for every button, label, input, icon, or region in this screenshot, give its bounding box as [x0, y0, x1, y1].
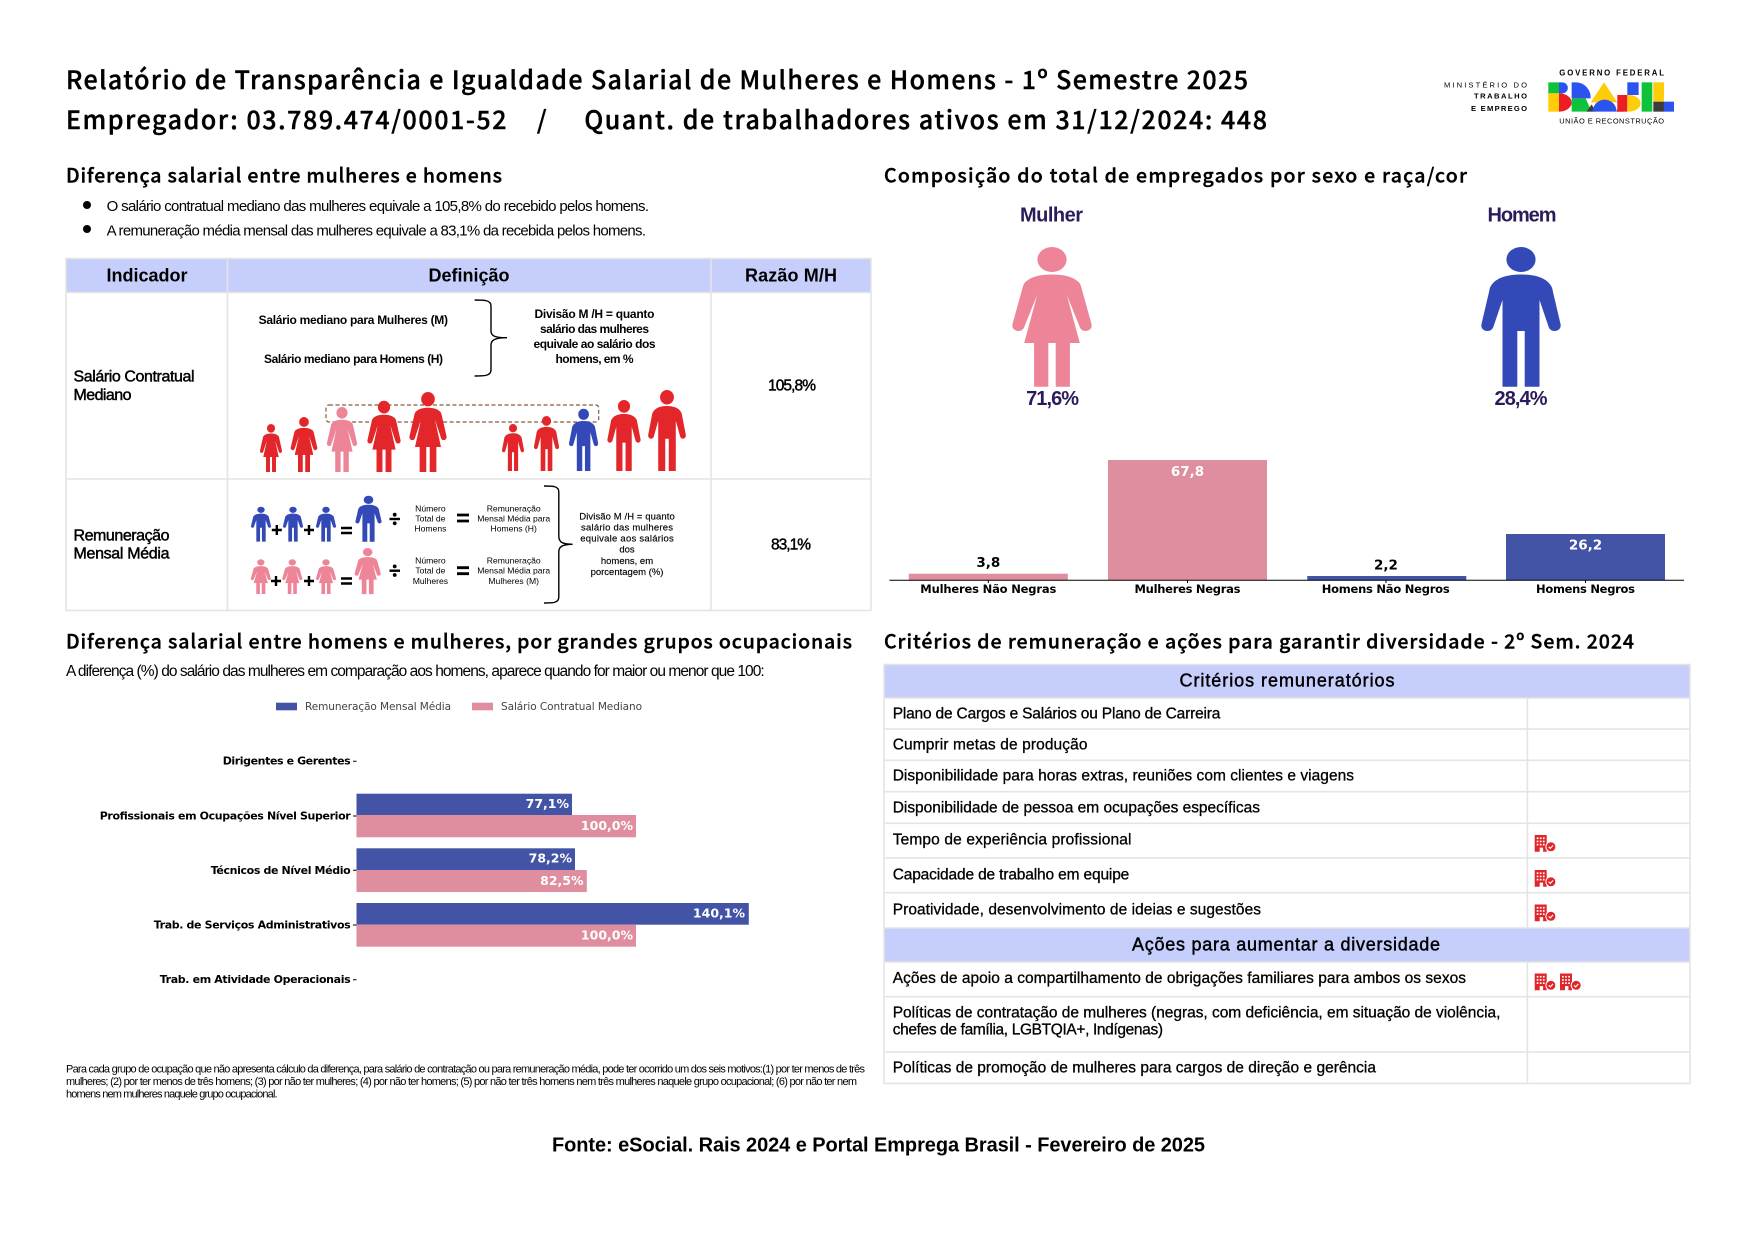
bullets: A remuneração média mensal das mulheres equivale a 83,1% da recebida pelos homens.	[107, 223, 646, 240]
footnote	[66, 1064, 866, 1100]
table: critérios e ações	[884, 664, 1690, 1084]
table: critérios e ações: Políticas de contratação de mulheres (negras, com deficiência, em situação de violência,	[893, 1005, 1500, 1022]
definition note: dos	[619, 545, 635, 556]
técnicos: 78,2%	[529, 851, 572, 866]
figure: homem: 28,4%	[1494, 388, 1548, 410]
formula labels: Homens (H)	[491, 524, 537, 534]
table: indicadores: Indicador	[106, 266, 188, 286]
definition note: Divisão M /H = quanto	[534, 307, 654, 321]
footnote: homens nem mulheres naquele grupo ocupacional.	[66, 1088, 278, 1100]
subtitle: A diferença (%) do salário das mulheres em comparação aos homens, aparece quando for maior ou menor que 100:	[66, 663, 765, 680]
source: Fonte: eSocial. Rais 2024 e Portal Emprega Brasil - Fevereiro de 2025	[552, 1135, 1205, 1157]
figure: mulher	[1012, 205, 1092, 410]
heading: composição: Composição do total de empregados por sexo e raça/cor	[884, 160, 1467, 189]
serviços administrativos	[356, 903, 749, 947]
category labels: Técnicos de Nível Médio	[211, 864, 351, 877]
table: critérios e ações: Disponibilidade para horas extras, reuniões com clientes e viagens	[893, 768, 1354, 785]
title	[66, 61, 1267, 137]
definition note	[579, 511, 675, 578]
people: men	[502, 390, 686, 471]
definition note: salário das mulheres	[540, 322, 649, 336]
table: critérios e ações: Disponibilidade de pessoa em ocupações específicas	[893, 799, 1260, 816]
definition note: porcentagem (%)	[591, 567, 663, 578]
logo: ministério e governo federal	[1444, 69, 1674, 125]
formula labels: Mulheres	[413, 576, 448, 586]
icon: empresa com selo, ações	[1535, 974, 1581, 990]
icon: empresa com selo, critérios	[1535, 835, 1556, 921]
row: salário contratual mediano	[74, 300, 816, 472]
category labels: Dirigentes e Gerentes	[223, 755, 351, 768]
formula labels: Remuneração	[487, 504, 541, 514]
logo: ministério e governo federal: TRABALHO	[1474, 92, 1527, 100]
category labels: Profissionais em Ocupações Nível Superior	[100, 810, 351, 822]
profissionais: 77,1%	[526, 796, 569, 811]
formula labels: Total de	[415, 565, 446, 575]
table: indicadores: Razão M/H	[745, 266, 837, 286]
legend	[276, 701, 642, 713]
formula labels	[413, 504, 550, 586]
bar chart: composição: 26,2	[1569, 538, 1602, 554]
category labels: Trab. de Serviços Administrativos	[154, 918, 351, 932]
formula labels: Total de	[415, 514, 446, 524]
definition note: homens, em	[601, 556, 653, 567]
footnote: mulheres; (2) por ter menos de três homens; (3) por não ter mulheres; (4) por não ter homens; (5) por não ter três homens nem três mulheres naquele grupo ocupacional; (6) por não ter nem	[66, 1076, 857, 1088]
category labels	[100, 755, 351, 986]
table: critérios e ações: Plano de Cargos e Salários ou Plano de Carreira	[893, 705, 1221, 722]
técnicos	[356, 848, 587, 892]
bar chart: composição: Homens Negros	[1536, 582, 1635, 596]
formula labels: Mensal Média para	[477, 514, 550, 524]
big brace	[544, 486, 573, 603]
table: indicadores: Definição	[428, 266, 510, 286]
table: critérios e ações: Ações para aumentar a diversidade	[1132, 934, 1440, 954]
heading: grupos ocupacionais: Diferença salarial entre homens e mulheres, por grandes grupos ocupacionais	[66, 625, 852, 654]
logo: ministério e governo federal: E EMPREGO	[1471, 104, 1527, 113]
median dashed box	[326, 405, 599, 422]
formula labels: Mulheres (M)	[488, 576, 539, 586]
bar chart: composição: Mulheres Não Negras	[920, 582, 1056, 596]
figure: homem: Homem	[1488, 205, 1556, 227]
definition note: equivale ao salário dos	[534, 337, 656, 351]
definition note: equivale aos salários	[580, 534, 674, 545]
profissionais: 100,0%	[581, 818, 633, 833]
value: 105,8%	[768, 378, 816, 394]
category labels: Trab. em Atividade Operacionais	[160, 973, 351, 986]
row: salário contratual mediano: Mediano	[74, 387, 132, 404]
definition note: salário das mulheres	[581, 523, 673, 534]
bullets	[83, 198, 649, 240]
heading: critérios: Critérios de remuneração e ações para garantir diversidade - 2º Sem. 2024	[884, 625, 1634, 654]
figure: mulher: 71,6%	[1026, 388, 1079, 410]
table: critérios e ações: Proatividade, desenvolvimento de ideias e sugestões	[893, 901, 1261, 918]
formula labels: Número	[415, 555, 446, 565]
bullets: O salário contratual mediano das mulheres equivale a 105,8% do recebido pelos homens.	[107, 198, 649, 215]
bar chart: composição: Homens Não Negros	[1322, 582, 1450, 596]
people: women	[260, 392, 447, 472]
logo: ministério e governo federal: MINISTÉRIO DO	[1444, 81, 1527, 90]
bar chart: composição: 3,8	[976, 555, 1000, 571]
bar chart: composição: Mulheres Negras	[1134, 582, 1241, 596]
formula labels: Número	[415, 504, 446, 514]
serviços administrativos: 100,0%	[581, 927, 633, 942]
row: remuneração mensal média: Remuneração	[74, 528, 170, 545]
table: critérios e ações: Políticas de promoção de mulheres para cargos de direção e gerência	[893, 1059, 1376, 1076]
table: critérios e ações: Capacidade de trabalho em equipe	[893, 866, 1129, 883]
formula labels: Mensal Média para	[477, 565, 550, 575]
definition note: Divisão M /H = quanto	[579, 511, 675, 522]
bar chart: composição: 67,8	[1171, 464, 1204, 480]
legend: Salário Contratual Mediano	[501, 701, 642, 713]
logo: ministério e governo federal: UNIÃO E RECONSTRUÇÃO	[1559, 116, 1664, 125]
técnicos: 82,5%	[540, 873, 584, 888]
definition note	[534, 307, 656, 366]
row: salário contratual mediano: Salário mediano para Mulheres (M)	[259, 313, 448, 327]
formula labels: Remuneração	[487, 555, 541, 565]
women formula	[251, 548, 469, 594]
table: critérios e ações: Critérios remuneratórios	[1180, 671, 1394, 691]
table: critérios e ações: Cumprir metas de produção	[893, 736, 1088, 753]
heading: diferença salarial: Diferença salarial entre mulheres e homens	[66, 160, 502, 189]
bar chart: composição	[889, 460, 1684, 596]
definition note: homens, em %	[556, 352, 634, 366]
logo: ministério e governo federal: GOVERNO FEDERAL	[1559, 69, 1664, 78]
row: remuneração mensal média	[74, 486, 811, 603]
row: salário contratual mediano: Salário mediano para Homens (H)	[264, 352, 443, 366]
figure: homem	[1481, 205, 1561, 410]
value: 83,1%	[771, 536, 811, 554]
table: critérios e ações: chefes de família, LGBTQIA+, Indígenas)	[893, 1021, 1163, 1038]
brace	[475, 300, 507, 376]
formula labels: Homens	[414, 524, 446, 534]
serviços administrativos: 140,1%	[693, 905, 745, 920]
title: Relatório de Transparência e Igualdade Salarial de Mulheres e Homens - 1º Semestre 2025	[66, 61, 1248, 97]
bar chart: composição: 2,2	[1374, 558, 1398, 574]
table: critérios e ações: Tempo de experiência profissional	[893, 831, 1132, 848]
legend: Remuneração Mensal Média	[305, 701, 451, 713]
men formula	[251, 496, 469, 542]
table: critérios e ações: Ações de apoio a compartilhamento de obrigações familiares para ambos os sexos	[893, 970, 1466, 987]
footnote: Para cada grupo de ocupação que não apresenta cálculo da diferença, para salário de contratação ou para remuneração média, pode ter ocorrido um dos seis motivos:(1) por ter menos de três	[66, 1064, 866, 1076]
row: remuneração mensal média: Mensal Média	[74, 545, 170, 562]
table: indicadores	[66, 258, 871, 610]
bar chart: grupos ocupacionais	[100, 755, 749, 986]
title: Empregador: 03.789.474/0001-52 / Quant. de trabalhadores ativos em 31/12/2024: 448	[66, 101, 1267, 137]
profissionais	[356, 794, 636, 837]
row: salário contratual mediano: Salário Contratual	[74, 369, 194, 386]
figure: mulher: Mulher	[1020, 205, 1083, 227]
